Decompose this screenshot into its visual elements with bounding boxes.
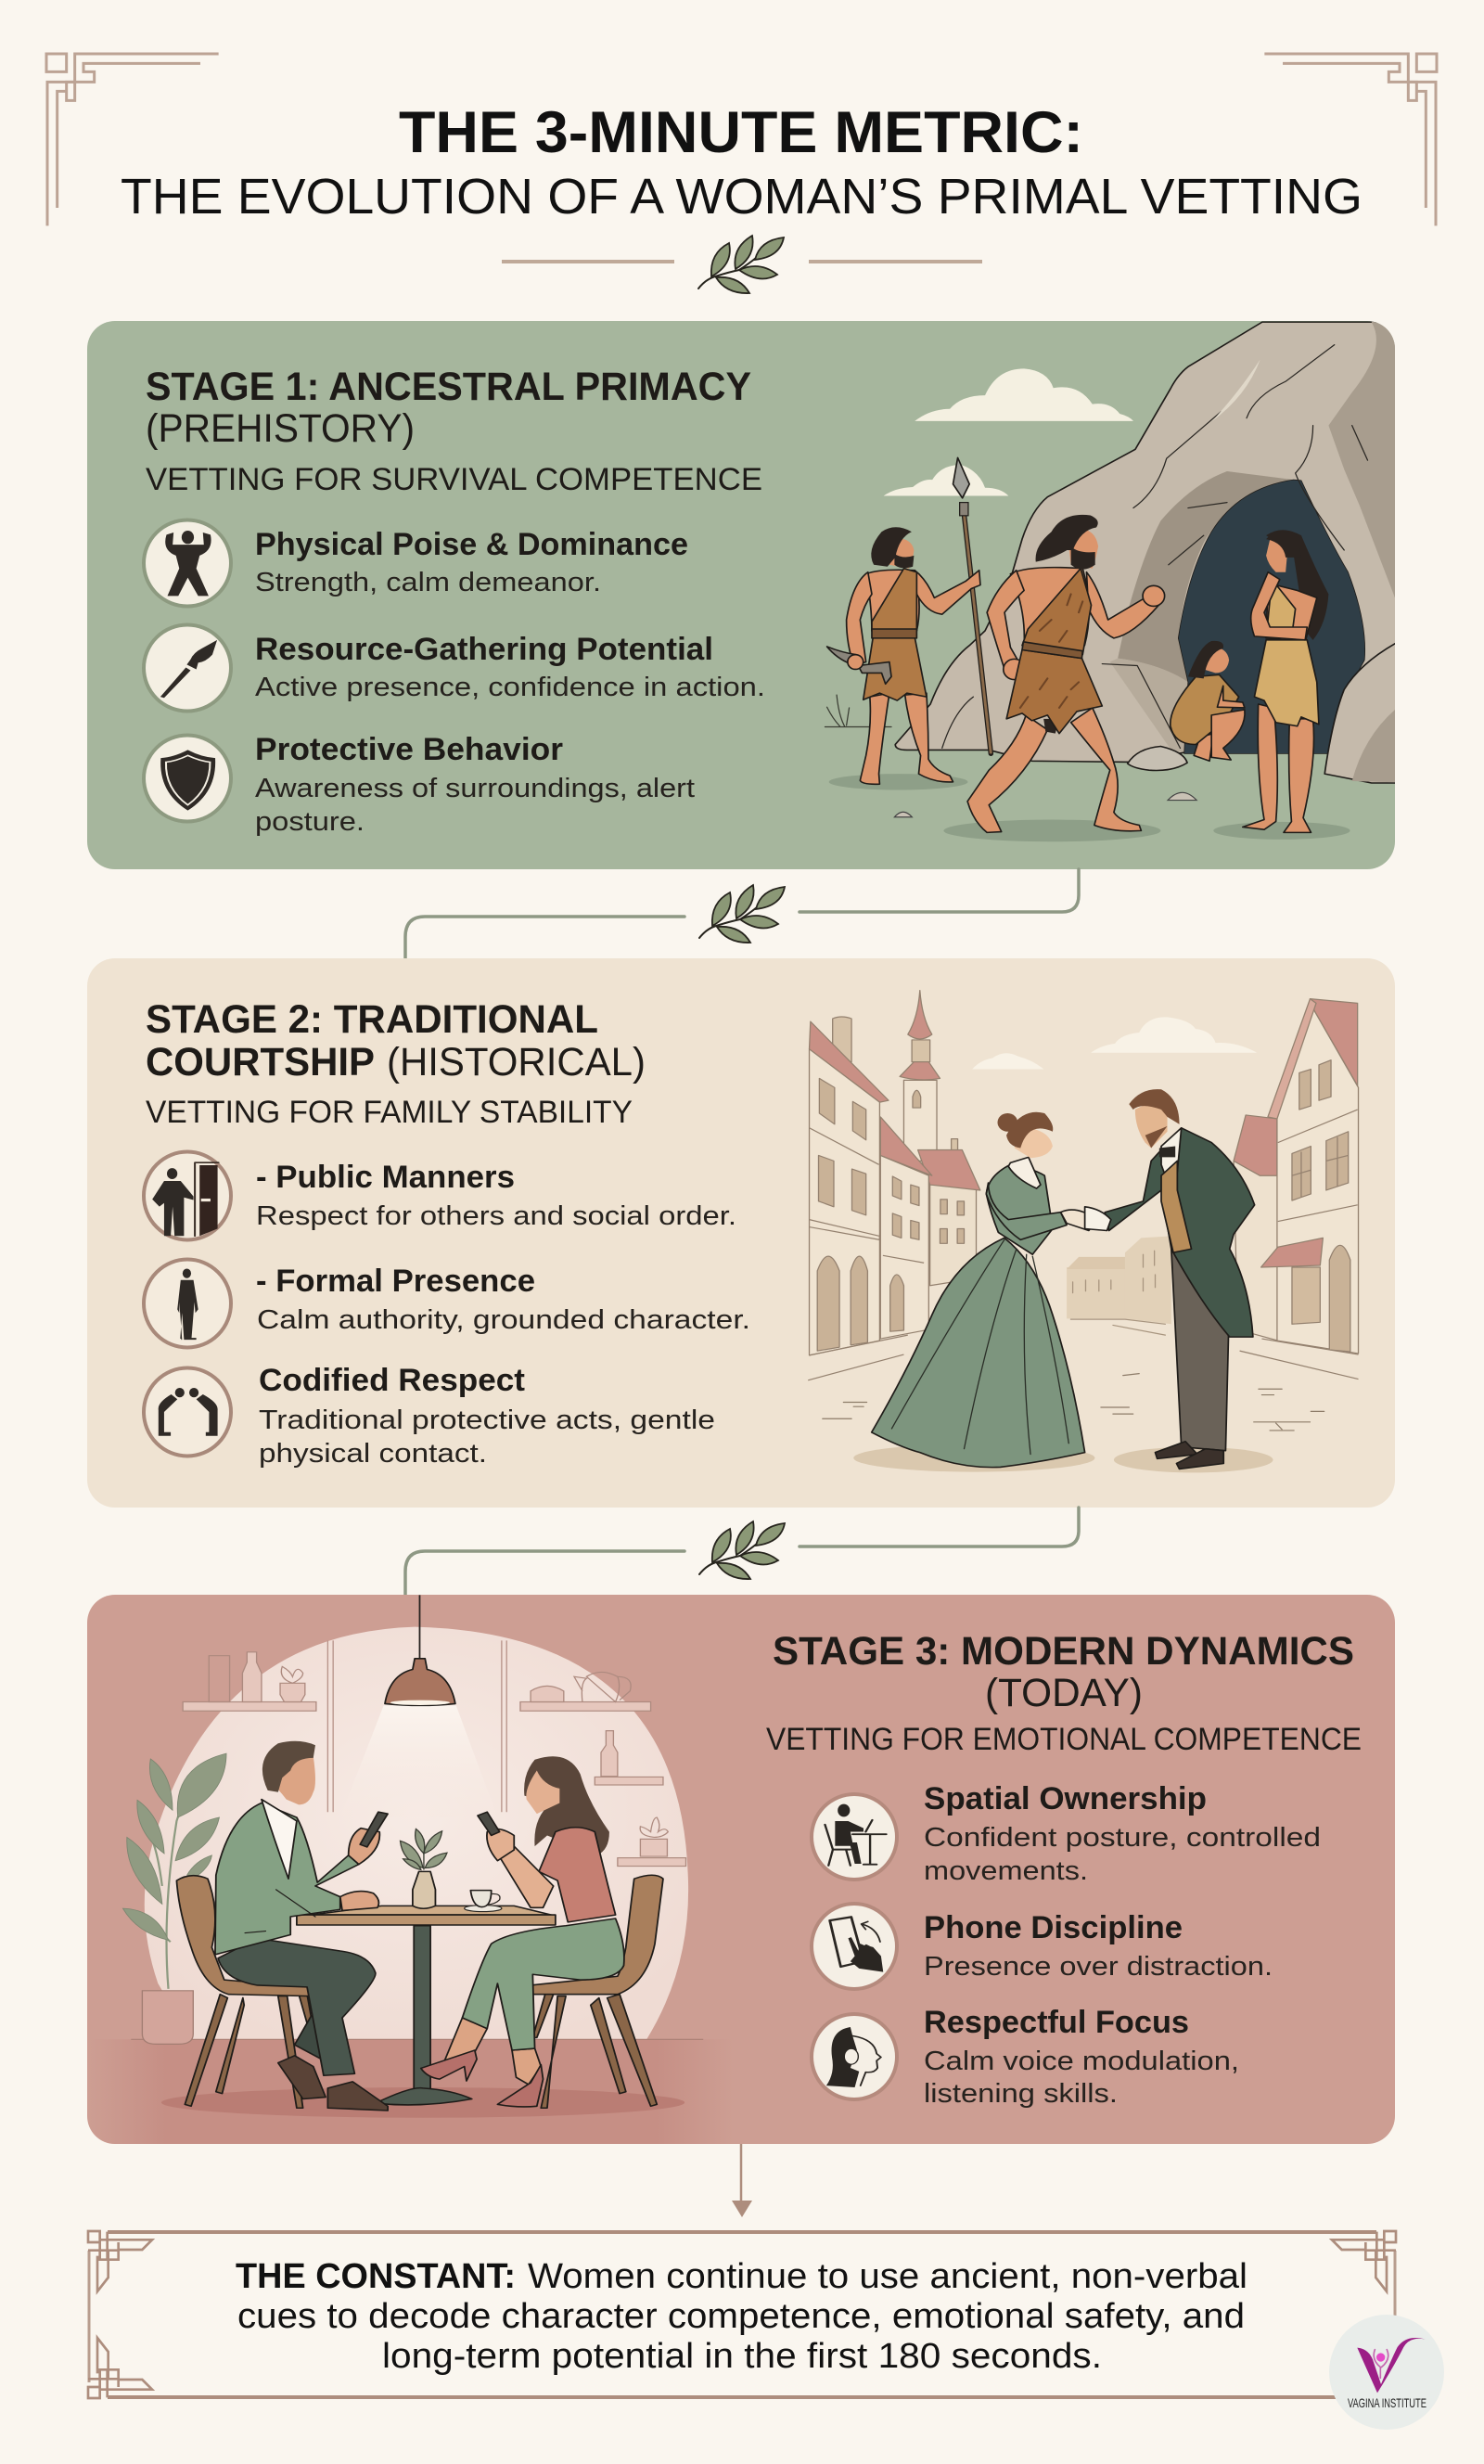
stage 1 heading xyxy=(146,365,751,451)
right chair xyxy=(531,1875,663,2108)
callout text: cues to decode character competence, emotional safety, and xyxy=(237,2297,1245,2336)
ground shadows xyxy=(829,774,1350,841)
stage 2 heading: STAGE 2: TRADITIONAL xyxy=(146,997,598,1042)
item: resource gathering xyxy=(144,625,765,711)
stage 3 heading: STAGE 3: MODERN DYNAMICS xyxy=(773,1629,1354,1674)
stage 2 heading: COURTSHIP xyxy=(146,1040,375,1084)
item: phone discipline xyxy=(812,1904,1273,1989)
stage 1 heading: STAGE 1: ANCESTRAL PRIMACY xyxy=(146,365,751,409)
cave rock xyxy=(895,315,1422,783)
arrow: stage 3 to constant xyxy=(732,2144,752,2217)
item: physical poise: Strength, calm demeanor. xyxy=(255,568,601,597)
table xyxy=(297,1829,556,2105)
item: codified respect: Codified Respect xyxy=(259,1363,525,1398)
item: formal presence: Calm authority, grounded character. xyxy=(257,1305,750,1335)
item: spatial ownership: movements. xyxy=(924,1856,1088,1886)
title xyxy=(121,100,1362,225)
panel: stage 2 xyxy=(87,958,1395,1508)
illustration: modern cafe date xyxy=(87,1595,734,2144)
item: public manners: - Public Manners xyxy=(256,1160,515,1195)
item: phone discipline: Presence over distraction. xyxy=(924,1952,1273,1982)
right buildings xyxy=(1234,999,1359,1380)
potted plant xyxy=(122,1753,226,2044)
woman in green dress xyxy=(872,1112,1097,1468)
stage 3 heading: (TODAY) xyxy=(985,1671,1143,1715)
illustration: prehistoric cave scene xyxy=(825,315,1422,841)
item: resource gathering: Active presence, confidence in action. xyxy=(255,673,765,702)
shelves xyxy=(183,1652,686,1867)
callout text xyxy=(236,2257,1247,2376)
corner ornament: top left xyxy=(46,54,219,225)
item: respectful focus: listening skills. xyxy=(924,2079,1118,2109)
woman standing xyxy=(1243,530,1328,832)
panel: stage 1 xyxy=(87,315,1422,869)
illustration: historical street handshake xyxy=(808,991,1359,1472)
item: codified respect xyxy=(144,1363,715,1469)
item: physical poise: Physical Poise & Dominance xyxy=(255,527,688,562)
item: respectful focus xyxy=(812,2005,1239,2109)
distant buildings xyxy=(1053,1236,1171,1324)
title divider with leaf xyxy=(502,236,982,293)
stage 1 heading: (PREHISTORY) xyxy=(146,406,415,451)
logo: vagina institute xyxy=(1329,2315,1444,2430)
man in frock coat xyxy=(1085,1089,1255,1469)
stage 3 heading xyxy=(773,1629,1354,1715)
stage 2 heading: (HISTORICAL) xyxy=(387,1040,646,1084)
item: codified respect: Traditional protective acts, gentle xyxy=(259,1405,715,1435)
corner ornament: top right xyxy=(1264,54,1437,225)
item: protective behavior: posture. xyxy=(255,807,365,837)
stage 2 subheading: VETTING FOR FAMILY STABILITY xyxy=(146,1095,633,1130)
panel: stage 3 xyxy=(87,1595,1395,2144)
title: THE EVOLUTION OF A WOMAN’S PRIMAL VETTING xyxy=(121,169,1362,225)
item: formal presence: - Formal Presence xyxy=(256,1264,535,1299)
item: respectful focus: Calm voice modulation, xyxy=(924,2047,1239,2076)
item: public manners xyxy=(144,1152,736,1239)
child crouching xyxy=(1171,641,1245,761)
left caveman xyxy=(827,527,980,784)
callout text: long-term potential in the first 180 seconds. xyxy=(382,2337,1102,2376)
item: codified respect: physical contact. xyxy=(259,1439,487,1469)
stage 3 subheading: VETTING FOR EMOTIONAL COMPETENCE xyxy=(766,1722,1362,1757)
backdrop arch xyxy=(145,1627,688,2039)
left chair xyxy=(176,1876,314,2108)
item: formal presence xyxy=(144,1260,750,1347)
connector: stage 2 to stage 3 xyxy=(405,1508,1079,1595)
title: THE 3-MINUTE METRIC: xyxy=(399,100,1083,165)
main caveman xyxy=(967,515,1165,832)
connector: stage 1 to stage 2 xyxy=(405,869,1079,958)
item: spatial ownership: Spatial Ownership xyxy=(924,1781,1207,1816)
item: respectful focus: Respectful Focus xyxy=(924,2005,1189,2040)
callout: the constant xyxy=(88,2231,1396,2398)
woman with phone xyxy=(421,1756,624,2107)
logo: vagina institute: VAGINA INSTITUTE xyxy=(1348,2395,1426,2410)
man with phone xyxy=(215,1741,388,2111)
stage 1 subheading: VETTING FOR SURVIVAL COMPETENCE xyxy=(146,462,762,497)
callout text: THE CONSTANT: xyxy=(236,2257,516,2296)
street marks and shadows xyxy=(823,1374,1324,1431)
clouds xyxy=(972,1017,1257,1070)
stones and grass xyxy=(825,695,1196,817)
callout text: Women continue to use ancient, non-verbal xyxy=(528,2257,1247,2296)
spear xyxy=(953,457,991,753)
item: protective behavior: Awareness of surroundings, alert xyxy=(255,774,695,803)
left buildings xyxy=(808,991,980,1380)
item: physical poise xyxy=(144,520,688,607)
item: phone discipline: Phone Discipline xyxy=(924,1910,1183,1945)
item: spatial ownership: Confident posture, controlled xyxy=(924,1823,1321,1853)
item: resource gathering: Resource-Gathering Potential xyxy=(255,632,713,667)
clouds xyxy=(884,368,1133,495)
item: protective behavior xyxy=(144,732,695,837)
stage 2 heading xyxy=(146,997,646,1084)
item: spatial ownership xyxy=(812,1781,1321,1886)
item: public manners: Respect for others and social order. xyxy=(256,1201,736,1231)
item: protective behavior: Protective Behavior xyxy=(255,732,563,767)
lamp xyxy=(385,1595,455,1705)
